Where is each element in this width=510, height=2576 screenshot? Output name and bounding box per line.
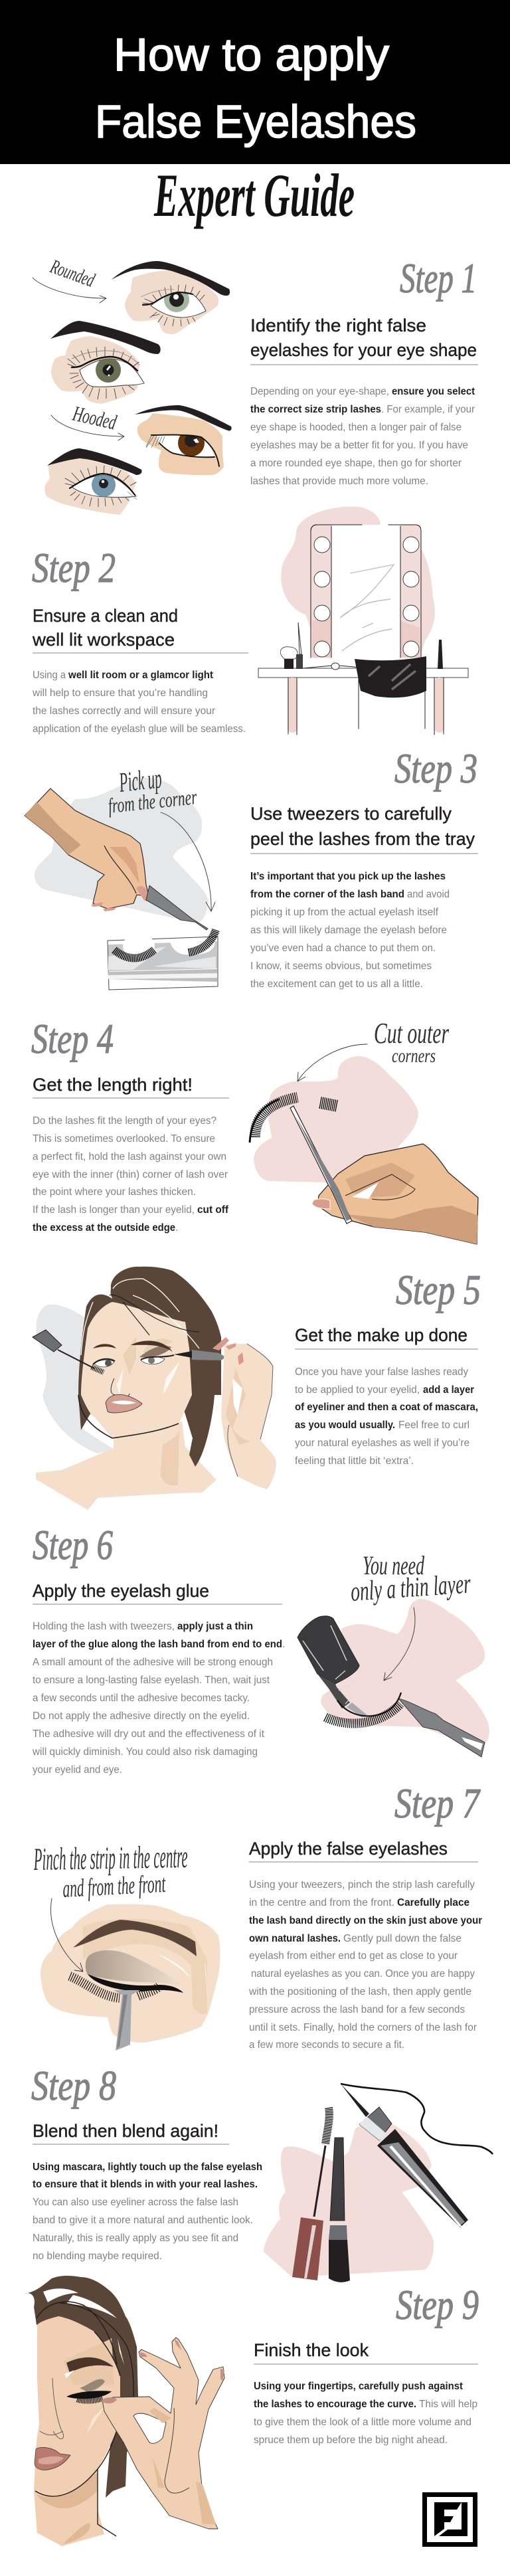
- body text: [33, 2162, 262, 2262]
- heading: well lit workspace: [32, 630, 175, 650]
- body text: the point where your lashes thicken.: [33, 1186, 196, 1198]
- body text: pressure across the lash band for a few seconds: [249, 2004, 465, 2015]
- body text: If the lash is longer than your eyelid,: [33, 1204, 195, 1216]
- handwritten note: Cut outer corners: Cut outer: [374, 1017, 450, 1050]
- body text: Once you have your false lashes ready: [295, 1366, 468, 1378]
- body text: eyelash from either end to get as close to your: [249, 1950, 458, 1962]
- body text: to give them the look of a little more volume and: [254, 2417, 471, 2428]
- handwritten note: Cut outer corners: [374, 1017, 450, 1067]
- body text: [248, 1879, 482, 2051]
- body text: feeling that little bit ‘extra’.: [295, 1455, 414, 1467]
- body text: you’ve even had a chance to put them on.: [250, 943, 436, 954]
- body text: lashes that provide much more volume.: [250, 476, 428, 487]
- panel: step 6: [32, 1521, 489, 1776]
- body text: a more rounded eye shape, then go for shorter: [250, 458, 462, 469]
- step label: Step 5: [396, 1266, 481, 1313]
- body text: eye with the inner (thin) corner of lash over: [33, 1169, 228, 1180]
- panel: step 3: [25, 745, 478, 990]
- body text: application of the eyelash glue will be seamless.: [33, 723, 246, 735]
- handwritten note: Pick up from the corner: Pick up: [118, 764, 163, 798]
- body text: a perfect fit, hold the lash against your own: [33, 1151, 226, 1162]
- subtitle: Expert Guide: Expert Guide: [153, 161, 355, 229]
- body text: . For example, if your: [381, 404, 475, 415]
- step label: Step 8: [31, 2062, 116, 2109]
- illustration: trimming lash with hand: [250, 1044, 478, 1244]
- body text: from the corner of the lash band: [250, 889, 404, 900]
- body text: will quickly diminish. You could also risk damaging: [32, 1746, 258, 1758]
- body text: Holding the lash with tweezers,: [33, 1621, 175, 1632]
- body text: ensure you select: [392, 386, 475, 397]
- body text: eyelashes may be a better fit for you. If you have: [250, 440, 468, 451]
- eye: olive rounded: [50, 321, 161, 404]
- body text: your natural eyelashes as well if you’re: [295, 1437, 469, 1449]
- body text: apply just a thin: [177, 1621, 253, 1632]
- handwritten note: Pick up from the corner: from the corner: [107, 784, 198, 818]
- heading: Blend then blend again!: [33, 2121, 218, 2141]
- body text: own natural lashes.: [249, 1933, 341, 1944]
- handwritten note: Rounded: Rounded: [47, 255, 98, 292]
- body text: the lash band directly on the skin just above your: [249, 1915, 482, 1926]
- eye: green rounded: [112, 261, 230, 334]
- body text: Do not apply the adhesive directly on the eyelid.: [33, 1710, 250, 1722]
- body text: the lashes to encourage the curve.: [254, 2399, 416, 2410]
- body text: Carefully place: [397, 1897, 469, 1908]
- step label: Step 7: [394, 1780, 481, 1827]
- body text: I know, it seems obvious, but sometimes: [250, 961, 432, 972]
- body text: with the positioning of the lash, then apply gentle: [248, 1986, 471, 1997]
- panel: step 1: [33, 254, 478, 515]
- body text: your eyelid and eye.: [33, 1764, 122, 1776]
- body text: Do the lashes fit the length of your eyes?: [33, 1115, 216, 1127]
- body text: This will help: [419, 2399, 477, 2410]
- body text: the excitement can get to us all a little.: [250, 978, 423, 990]
- step label: Step 9: [396, 2281, 479, 2328]
- panel: step 5: [33, 1266, 481, 1510]
- illustration: woman curling lashes with fingertips: [25, 2276, 224, 2546]
- body text: Naturally, this is really apply as you see fit and: [33, 2233, 238, 2244]
- title: [95, 29, 416, 147]
- body text: spruce them up before the big night ahead.: [254, 2435, 448, 2446]
- illustration: vanity mirror and table: [258, 507, 468, 735]
- body text: You can also use eyeliner across the false lash: [33, 2197, 238, 2208]
- heading: [250, 804, 478, 854]
- body text: [33, 1115, 229, 1234]
- body text: cut off: [197, 1204, 229, 1216]
- body text: to ensure that it blends in with your real lashes.: [33, 2179, 258, 2190]
- body text: band to give it a more natural and authentic look.: [33, 2215, 253, 2226]
- body text: .: [175, 1222, 178, 1234]
- body text: eye shape is hooded, then a longer pair of false: [250, 422, 462, 433]
- heading: Identify the right false: [250, 316, 426, 335]
- step label: Step 1: [400, 254, 477, 302]
- header band: [0, 0, 510, 164]
- panel: step 9: [25, 2276, 479, 2546]
- body text: of eyeliner and then a coat of mascara,: [295, 1402, 478, 1413]
- body text: and avoid: [407, 889, 450, 900]
- title: False Eyelashes: [95, 96, 416, 147]
- heading: [250, 316, 478, 365]
- body text: to be applied to your eyelid,: [295, 1384, 420, 1396]
- step label: Step 4: [31, 1015, 114, 1062]
- title: How to apply: [114, 29, 389, 80]
- body text: picking it up from the actual eyelash itself: [250, 907, 439, 918]
- body text: A small amount of the adhesive will be strong enough: [33, 1657, 273, 1668]
- body text: until it sets. Finally, hold the corners of the lash for: [249, 2022, 477, 2033]
- body text: as you would usually.: [295, 1420, 395, 1431]
- handwritten note: Pick up from the corner: [107, 764, 198, 818]
- body text: in the centre and from the front.: [249, 1897, 394, 1908]
- body text: Gently pull down the false: [343, 1933, 462, 1944]
- heading: Finish the look: [254, 2340, 369, 2360]
- arrow: hooded: [51, 415, 124, 440]
- heading: Apply the false eyelashes: [249, 1839, 448, 1859]
- heading: eyelashes for your eye shape: [250, 340, 477, 360]
- body text: add a layer: [423, 1384, 474, 1396]
- body text: [295, 1366, 478, 1467]
- illustration: hand with tweezers and lash tray: [25, 777, 218, 990]
- body text: will help to ensure that you’re handling: [32, 688, 208, 699]
- body text: as this will likely damage the eyelash before: [250, 925, 447, 936]
- eye: blue rounded: [44, 448, 142, 515]
- handwritten note: Pinch the strip in the centre and from the front: [33, 1839, 188, 1903]
- panel: step 7: [33, 1780, 482, 2051]
- illustration: mascara and eyeliner: [264, 2084, 493, 2282]
- panel: step 7: Pinch the strip in the centre: [33, 1839, 188, 1877]
- handwritten note: Hooded: Hooded: [70, 401, 119, 434]
- body text: the correct size strip lashes: [250, 404, 381, 415]
- heading: Ensure a clean and: [33, 606, 178, 626]
- body text: .: [282, 1639, 285, 1650]
- body text: layer of the glue along the lash band from end to end: [33, 1639, 282, 1650]
- heading: [32, 606, 248, 653]
- heading: Get the make up done: [295, 1325, 468, 1345]
- body text: no blending maybe required.: [33, 2251, 162, 2262]
- illustration: woman applying make up: [33, 1267, 276, 1510]
- handwritten note: Cut outer corners: corners: [392, 1045, 436, 1067]
- body text: the lashes correctly and will ensure your: [33, 705, 216, 717]
- body text: Using a: [33, 670, 66, 681]
- body text: natural eyelashes as you can. Once you are happy: [251, 1968, 475, 1979]
- arrow: rounded: [33, 278, 106, 303]
- body text: well lit room or a glamcor light: [68, 670, 214, 681]
- step label: Step 2: [32, 544, 116, 591]
- heading: peel the lashes from the tray: [250, 829, 475, 849]
- body text: Using your fingertips, carefully push against: [254, 2381, 464, 2392]
- body text: the excess at the outside edge: [33, 1222, 175, 1234]
- body text: [250, 871, 450, 990]
- body text: a few seconds until the adhesive becomes tacky.: [33, 1693, 250, 1704]
- illustration: closed eye with tweezers placing lash: [41, 1898, 220, 2051]
- body text: Depending on your eye-shape,: [250, 386, 389, 397]
- illustration: glue bottle, lash and tweezers: [298, 1599, 489, 1757]
- handwritten note: You need only a thin layer: [349, 1550, 472, 1608]
- panel: step 2: [32, 507, 468, 735]
- handwritten note: You need only a thin layer: You need: [363, 1550, 425, 1580]
- panel: step 4: [31, 1015, 478, 1244]
- step label: Step 6: [33, 1521, 113, 1568]
- body text: Using mascara, lightly touch up the false eyelash: [33, 2162, 262, 2173]
- heading: Apply the eyelash glue: [33, 1581, 209, 1601]
- body text: [254, 2381, 477, 2446]
- logo: [422, 2492, 477, 2547]
- step label: Step 3: [394, 745, 477, 792]
- body text: It’s important that you pick up the lashes: [250, 871, 446, 882]
- body text: to ensure a long-lasting false eyelash. Then, wait just: [33, 1675, 270, 1686]
- body text: Using your tweezers, pinch the strip lash carefully: [249, 1879, 475, 1890]
- handwritten note: Pinch the strip in the centre and from the front: and from the front: [62, 1870, 167, 1903]
- panel: step 8: [31, 2062, 493, 2282]
- heading: Get the length right!: [33, 1075, 193, 1095]
- eye: brown hooded: [135, 405, 232, 475]
- body text: a few more seconds to secure a fit.: [249, 2039, 404, 2051]
- body text: [32, 1621, 285, 1776]
- heading: Use tweezers to carefully: [250, 804, 452, 824]
- body text: [250, 386, 475, 487]
- body text: The adhesive will dry out and the effectiveness of it: [33, 1728, 265, 1740]
- body text: This is sometimes overlooked. To ensure: [33, 1133, 215, 1145]
- body text: Feel free to curl: [398, 1420, 469, 1431]
- body text: [32, 670, 246, 735]
